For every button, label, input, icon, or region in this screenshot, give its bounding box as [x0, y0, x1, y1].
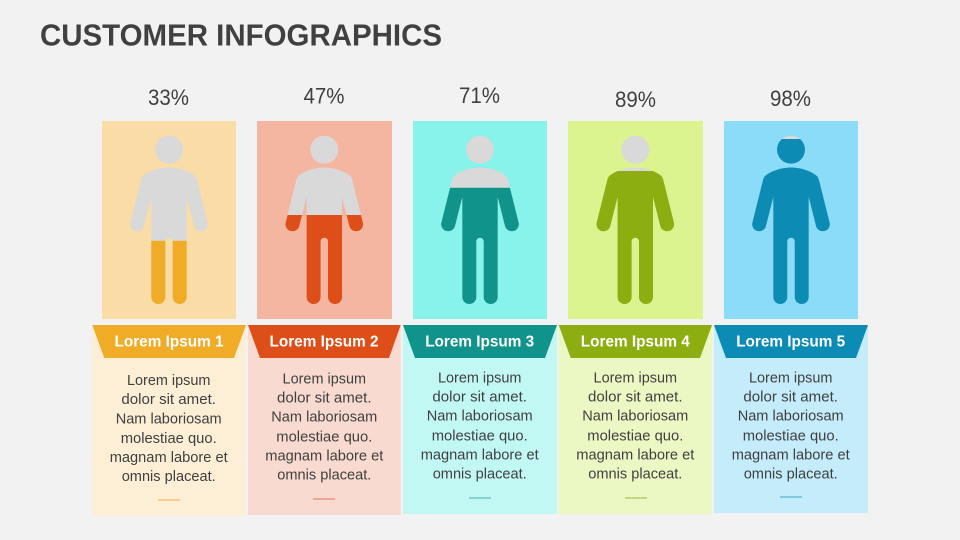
- card 1 header ribbon: [92, 325, 246, 358]
- card 4 body text: molestiae quo.: [587, 427, 683, 444]
- percentage: 47%: 47%: [304, 84, 344, 108]
- card 3 body text: [421, 369, 540, 482]
- card 4 header ribbon: [559, 325, 712, 358]
- card 3 body text: Nam laboriosam: [427, 408, 533, 425]
- card 4 body text: Lorem ipsum: [594, 369, 677, 386]
- percentage: 89%: 89%: [615, 87, 656, 112]
- card 3 body text: molestiae quo.: [432, 427, 528, 444]
- percentage: 71%: 71%: [459, 83, 500, 108]
- card 3 header ribbon: [403, 325, 557, 358]
- panel: card 5: [714, 325, 868, 513]
- card 2 body text: Lorem ipsum: [283, 370, 366, 387]
- panel: card 4: [559, 325, 712, 514]
- card 3 heading: Lorem Ipsum 3: [425, 334, 535, 350]
- card 5 header ribbon: [714, 325, 868, 358]
- card 4 body text: omnis placeat.: [588, 465, 682, 482]
- card 1 body text: molestiae quo.: [121, 430, 217, 447]
- card 1 body text: [110, 372, 229, 485]
- card 3 body text: dolor sit amet.: [432, 388, 527, 405]
- panel: card 3: [403, 325, 557, 514]
- card 3 body text: Lorem ipsum: [438, 369, 521, 386]
- icon: person filled 47%: [285, 136, 363, 304]
- card 5 heading: Lorem Ipsum 5: [736, 334, 846, 350]
- card 5 body text: Nam laboriosam: [738, 408, 844, 425]
- card 4 body text: [576, 369, 695, 482]
- card 5 body text: Lorem ipsum: [749, 369, 832, 386]
- card 1 body text: Nam laboriosam: [116, 410, 222, 427]
- card 2 body text: [265, 370, 384, 483]
- card 5 body text: magnam labore et: [732, 446, 851, 463]
- card 1 heading: Lorem Ipsum 1: [114, 334, 224, 350]
- panel: figure 2 background: [257, 121, 392, 319]
- card 4 body text: Nam laboriosam: [582, 408, 688, 425]
- card 1 body text: Lorem ipsum: [127, 372, 210, 389]
- card 2 body text: magnam labore et: [265, 447, 384, 464]
- percentage: 98%: 98%: [770, 86, 811, 111]
- card 5 body text: dolor sit amet.: [743, 388, 838, 405]
- card 1 body text: omnis placeat.: [122, 468, 216, 485]
- card 4 body text: dolor sit amet.: [588, 388, 683, 405]
- title: CUSTOMER INFOGRAPHICS: [40, 18, 442, 52]
- icon: person filled 71%: [441, 136, 519, 304]
- card 5 body text: molestiae quo.: [743, 427, 839, 444]
- panel: card 2: [248, 325, 401, 515]
- card 4 body text: magnam labore et: [576, 446, 695, 463]
- panel: figure 1 background: [102, 121, 236, 319]
- card 2 body text: molestiae quo.: [276, 428, 372, 445]
- card 2 body text: omnis placeat.: [277, 466, 371, 483]
- panel: figure 4 background: [568, 121, 703, 319]
- panel: card 1: [92, 325, 246, 516]
- card 2 heading: Lorem Ipsum 2: [270, 334, 378, 350]
- card 2 body text: Nam laboriosam: [271, 409, 377, 426]
- card 2 body text: dolor sit amet.: [277, 389, 372, 406]
- icon: person filled 98%: [752, 136, 830, 304]
- card 2 header ribbon: [248, 325, 401, 358]
- card 3 body text: magnam labore et: [421, 446, 540, 463]
- card 1 body text: dolor sit amet.: [121, 391, 216, 408]
- card 4 heading: Lorem Ipsum 4: [581, 334, 690, 350]
- icon: person filled 89%: [596, 136, 674, 304]
- card 5 body text: omnis placeat.: [744, 465, 838, 482]
- percentage: 33%: 33%: [148, 85, 189, 110]
- card 3 body text: omnis placeat.: [433, 465, 527, 482]
- icon: person filled 33%: [130, 136, 208, 304]
- card 5 body text: [732, 369, 851, 482]
- panel: figure 3 background: [413, 121, 547, 319]
- panel: figure 5 background: [724, 121, 858, 319]
- card 1 body text: magnam labore et: [110, 449, 229, 466]
